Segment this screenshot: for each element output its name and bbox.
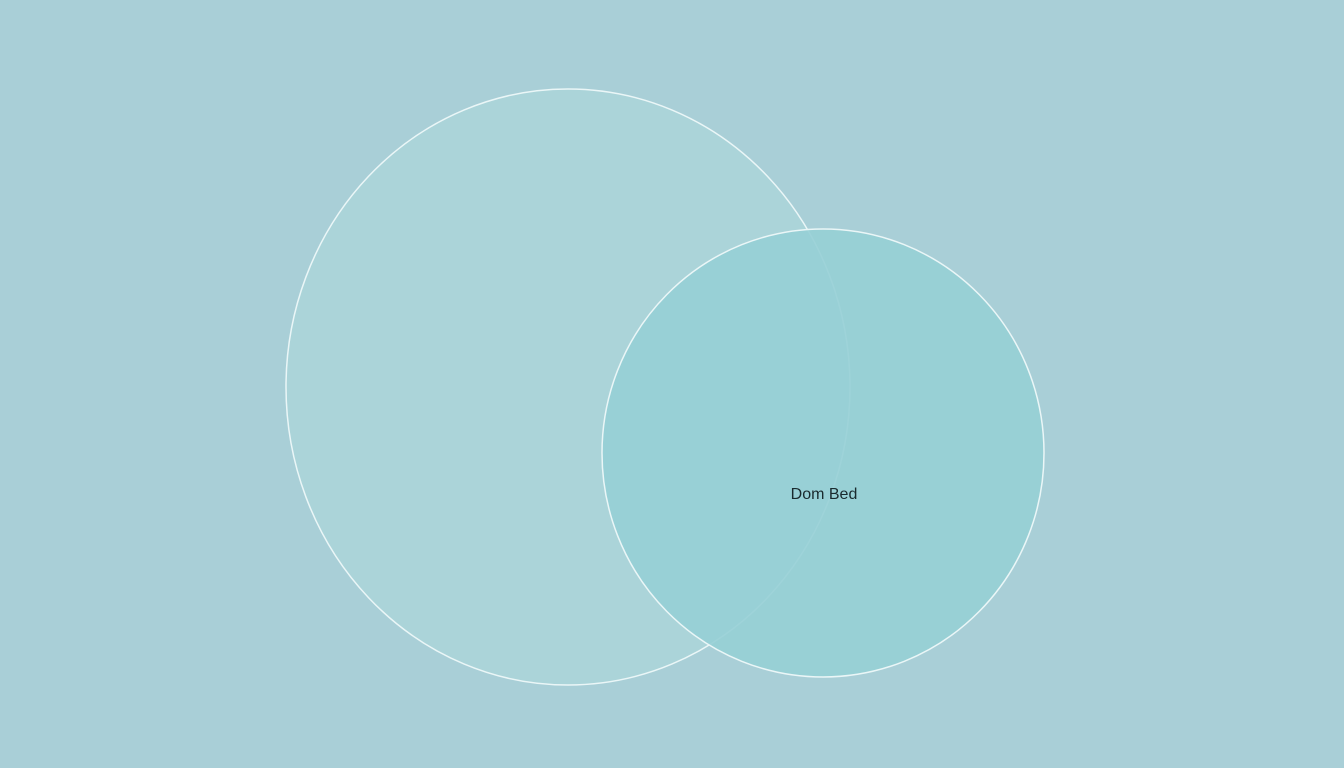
circle: smaller right bbox=[602, 229, 1044, 677]
circle: large left bbox=[286, 89, 850, 685]
label: Dom Bed: Dom Bed bbox=[791, 486, 857, 503]
